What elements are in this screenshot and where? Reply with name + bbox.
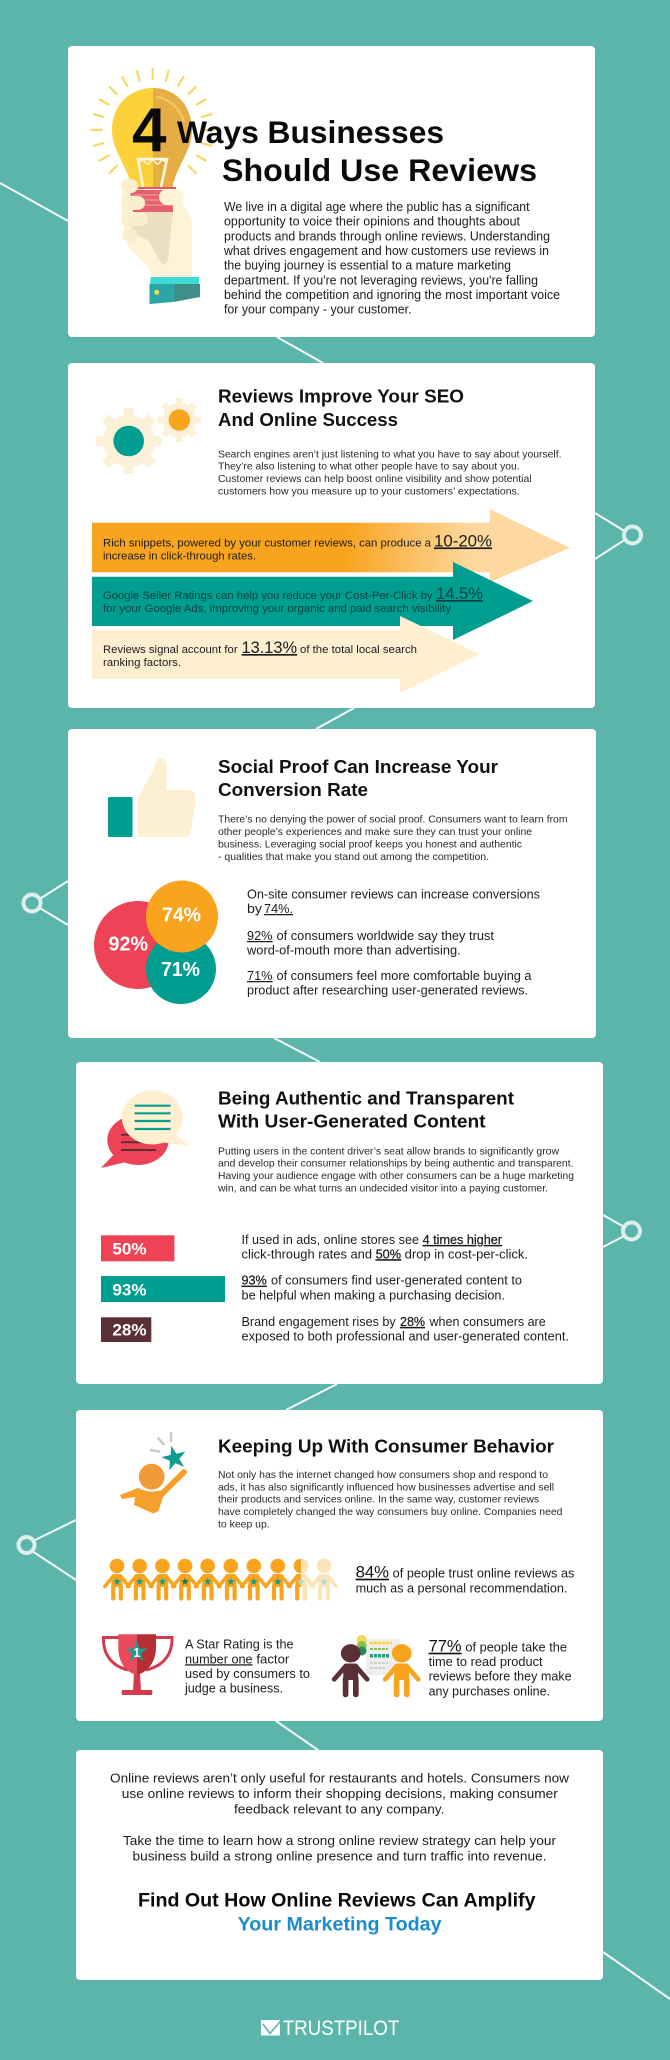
closing text: feedback relevant to any company.	[234, 1802, 444, 1817]
icon: gears	[96, 398, 201, 474]
authentic content statistics: 4 times higher	[423, 1233, 502, 1247]
chart: overlapping percentage circles: 71%	[161, 959, 200, 981]
intro text: what drives engagement and how customers use reviews in	[223, 244, 549, 258]
arrow: rich snippets	[92, 509, 570, 582]
icon: row of people with stars	[105, 1559, 336, 1598]
authentic content body text: and develop their consumer relationships by being authentic and transparent.	[218, 1159, 574, 1170]
arrow: Google seller ratings: Google Seller Ratings can help you reduce your Cost-Per-Click by	[103, 590, 433, 602]
heading: SEO: And Online Success	[218, 409, 398, 430]
authentic content body text: Having your audience engage with other consumers can be a huge marketing	[218, 1171, 574, 1182]
intro text: department. If you're not leveraging reviews, you're falling	[224, 273, 538, 287]
closing text: use online reviews to inform their shopping decisions, making consumer	[122, 1786, 559, 1801]
authentic content statistics: exposed to both professional and user-generated content.	[242, 1330, 569, 1344]
consumer behavior body text: their products and services online. In the same way, customer reviews	[218, 1495, 539, 1506]
social proof statistics	[246, 887, 540, 997]
intro text	[223, 200, 560, 317]
arrow: Google seller ratings	[92, 562, 533, 640]
arrow: local search: of the total local search	[300, 644, 417, 656]
arrow: local search	[92, 616, 480, 693]
arrow: Google seller ratings: for your Google Ads, improving your organic and paid search visibility	[103, 603, 451, 615]
panel: closing	[76, 1750, 603, 1980]
authentic content body text: Putting users in the content driver’s seat allow brands to significantly grow	[218, 1146, 560, 1157]
panel: social proof	[68, 729, 596, 1038]
title: Ways Businesses	[177, 114, 444, 150]
social proof body text: other people’s experiences and make sure they can trust your online	[218, 827, 532, 838]
social proof body text: There’s no denying the power of social proof. Consumers want to learn from	[218, 815, 568, 826]
statistic: star rating: A Star Rating is the	[185, 1637, 294, 1651]
authentic content statistics: 93%	[242, 1274, 267, 1288]
consumer behavior body text: Not only has the internet changed how consumers shop and respond to	[218, 1470, 548, 1481]
consumer behavior body text: have completely changed the way consumers buy online. Companies need	[218, 1507, 563, 1518]
authentic content statistics: 50%	[376, 1247, 401, 1261]
title	[132, 96, 537, 188]
arrow: Google seller ratings: 14.5%	[436, 584, 483, 603]
statistic: star rating: number one	[185, 1652, 253, 1666]
social proof statistics: 71%	[247, 969, 272, 983]
chart: overlapping percentage circles	[94, 880, 218, 1004]
closing text: business build a strong online presence and turn traffic into revenue.	[132, 1848, 546, 1863]
authentic content statistics: 28%	[400, 1315, 425, 1329]
closing text	[110, 1770, 570, 1863]
icon: trophy	[103, 1634, 172, 1695]
logo: Trustpilot: TRUSTPILOT	[283, 2016, 399, 2040]
heading: social proof: Social Proof Can Increase Your	[218, 756, 499, 777]
icon: trophy: 1	[134, 1645, 140, 1660]
SEO body text: Customer reviews can help boost online visibility and show potential	[218, 474, 532, 485]
intro text: the buying journey is essential to a mature marketing	[224, 259, 511, 273]
authentic content body text	[217, 1146, 574, 1194]
SEO body text: Search engines aren’t just listening to what you have to say about yourself.	[218, 449, 562, 460]
authentic content statistics: click-through rates and	[242, 1247, 372, 1261]
statistic: star rating: judge a business.	[184, 1681, 283, 1695]
call to action: Find Out How Online Reviews Can Amplify	[138, 1890, 536, 1912]
heading: authentic content	[218, 1087, 515, 1132]
statistic: 77%: reviews before they make	[429, 1670, 572, 1684]
social proof statistics: of consumers worldwide say they trust	[276, 929, 495, 943]
panel: consumer behavior	[76, 1410, 603, 1721]
authentic content statistics: Brand engagement rises by	[242, 1315, 396, 1329]
statistic: 84%: 84%	[356, 1563, 389, 1582]
social proof body text: - qualities that make you stand out among the competition.	[218, 852, 489, 863]
chart: overlapping percentage circles: 74%	[162, 905, 201, 927]
bar chart: 93%	[112, 1281, 147, 1300]
closing text: Take the time to learn how a strong online review strategy can help your	[123, 1833, 557, 1848]
heading: authentic content: With User-Generated Content	[218, 1111, 486, 1132]
call to action	[138, 1890, 536, 1936]
authentic content statistics: of consumers find user-generated content to	[271, 1274, 522, 1288]
authentic content statistics: be helpful when making a purchasing decision.	[242, 1288, 505, 1302]
consumer behavior body text: ads, it has also significantly influenced how businesses advertise and sell	[218, 1482, 554, 1493]
SEO body text: customers how you measure up to your customers’ expectations.	[218, 486, 520, 497]
arrow: rich snippets: Rich snippets, powered by your customer reviews, can produce a	[103, 537, 432, 549]
social proof body text: business. Leveraging social proof keeps you honest and authentic	[218, 840, 522, 850]
intro text: products and brands through online reviews. Understanding	[224, 229, 550, 243]
statistic: 77%: of people take the	[465, 1641, 567, 1655]
statistic: star rating: factor	[256, 1652, 289, 1666]
SEO body text: They’re also listening to what other people have to say about you.	[218, 462, 520, 473]
social proof statistics: by	[247, 902, 263, 916]
panel: authentic content	[76, 1062, 603, 1384]
authentic content statistics: If used in ads, online stores see	[242, 1233, 419, 1247]
chart: overlapping percentage circles: 92%	[108, 934, 148, 956]
title: 4	[132, 96, 167, 165]
icon: thumbs up	[108, 758, 196, 837]
icon: two people reading a review card	[334, 1635, 418, 1695]
bar chart	[101, 1235, 225, 1342]
arrow: rich snippets: 10-20%	[434, 531, 492, 550]
heading: SEO: Reviews Improve Your SEO	[218, 386, 464, 407]
authentic content statistics	[242, 1233, 569, 1344]
social proof statistics: word-of-mouth more than advertising.	[246, 943, 461, 957]
social proof body text	[218, 815, 568, 863]
social proof statistics: product after researching user-generated reviews.	[247, 983, 528, 997]
heading: SEO	[218, 386, 464, 430]
statistic: 84%: of people trust online reviews as	[393, 1567, 574, 1581]
heading: authentic content: Being Authentic and Transparent	[218, 1087, 515, 1108]
statistic: 84%: much as a personal recommendation.	[356, 1581, 568, 1595]
intro text: for your company - your customer.	[224, 303, 412, 317]
social proof statistics: 92%	[247, 929, 272, 943]
heading: social proof: Conversion Rate	[218, 779, 368, 800]
call to action: Your Marketing Today	[238, 1914, 442, 1936]
arrow: rich snippets: increase in click-through rates.	[103, 550, 256, 562]
statistic: 77%: any purchases online.	[429, 1684, 550, 1698]
statistic: 77%: time to read product	[429, 1655, 543, 1669]
arrow: local search: Reviews signal account for	[103, 644, 238, 656]
closing text: Online reviews aren’t only useful for restaurants and hotels. Consumers now	[110, 1770, 570, 1785]
icon: person reaching for star	[120, 1432, 189, 1514]
SEO body text	[218, 449, 562, 497]
intro text: opportunity to voice their opinions and thoughts about	[224, 215, 520, 229]
heading: social proof	[218, 756, 499, 800]
arrow: local search: ranking factors.	[103, 657, 181, 669]
consumer behavior body text	[218, 1470, 563, 1530]
authentic content statistics: drop in cost-per-click.	[405, 1247, 528, 1261]
icon: speech bubbles	[101, 1090, 189, 1168]
authentic content statistics: when consumers are	[429, 1315, 546, 1329]
bar chart: 28%	[112, 1321, 147, 1340]
panel: SEO	[68, 363, 595, 708]
social proof statistics: On-site consumer reviews can increase conversions	[247, 887, 540, 901]
title: Should Use Reviews	[222, 152, 537, 188]
icon: light bulb held by hand	[92, 69, 214, 304]
intro text: We live in a digital age where the public has a significant	[224, 200, 530, 214]
social proof statistics: of consumers feel more comfortable buying a	[276, 969, 532, 983]
statistic: 84%	[356, 1563, 574, 1595]
statistic: star rating: used by consumers to	[185, 1667, 310, 1681]
panel: intro	[68, 46, 595, 337]
statistic: 77%	[429, 1637, 572, 1698]
arrow: local search: 13.13%	[242, 639, 297, 657]
statistic: 77%: 77%	[429, 1637, 462, 1656]
authentic content body text: win, and can be what turns an undecided visitor into a paying customer.	[217, 1183, 548, 1194]
statistic: star rating	[184, 1637, 310, 1695]
bar chart: 50%	[112, 1239, 147, 1258]
social proof statistics: 74%.	[264, 902, 293, 916]
heading: consumer behavior: Keeping Up With Consumer Behavior	[218, 1436, 555, 1457]
intro text: behind the competition and ignoring the most important voice	[224, 288, 560, 302]
consumer behavior body text: to keep up.	[218, 1519, 270, 1530]
